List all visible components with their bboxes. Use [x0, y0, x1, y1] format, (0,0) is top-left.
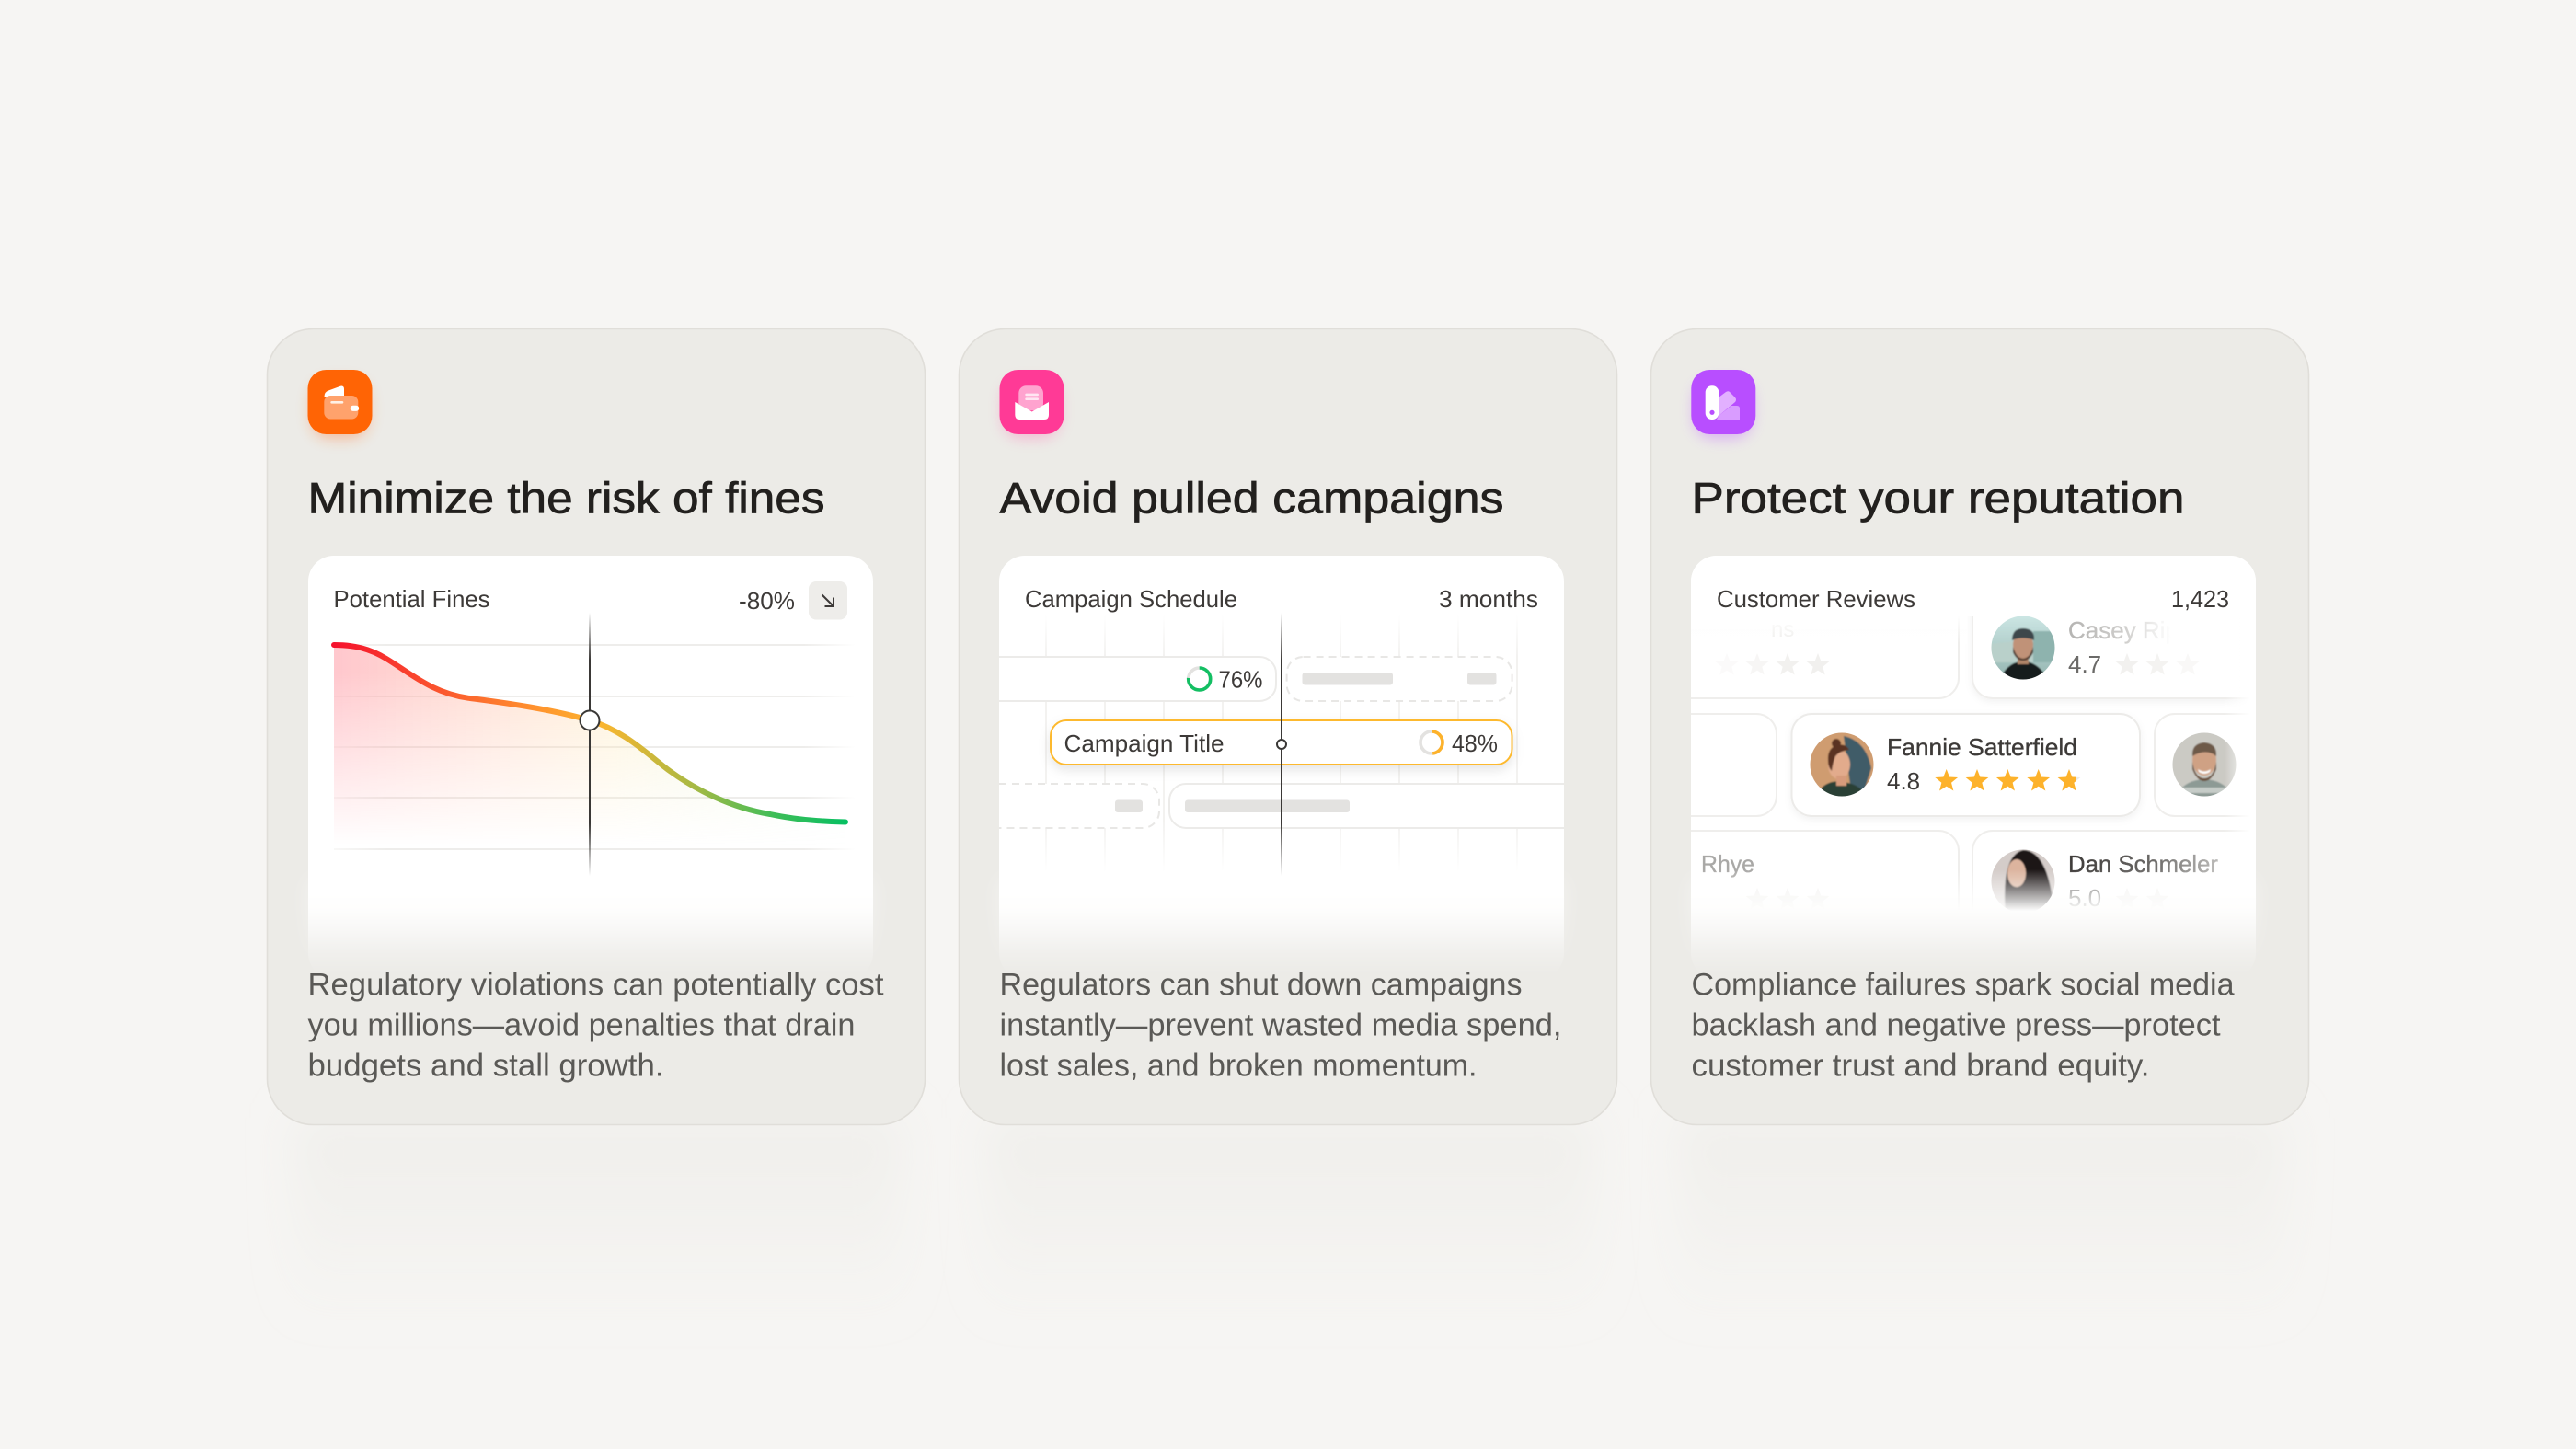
review card: casey: Casey Rippin [2068, 616, 2211, 644]
chart: gradient curve [334, 645, 845, 822]
avatar: dan [1987, 846, 2061, 920]
review card: top left faded [1691, 627, 1960, 699]
review card: dan schmeler: Dan Schmeler [2068, 850, 2218, 878]
text block: description: instantly—prevent wasted media spend, [999, 1008, 1562, 1043]
widget: customer reviews [1691, 556, 2256, 946]
row: solid placeholder [1169, 784, 1611, 828]
review card: top left faded: ns [1771, 617, 1794, 642]
label: potential fines: Potential Fines [333, 585, 489, 613]
text block: description [1691, 968, 2235, 1084]
icon: open envelope [999, 370, 1064, 438]
panel: minimize the risk of fines [267, 329, 926, 1124]
label: campaign schedule: Campaign Schedule [1025, 585, 1237, 613]
widget: potential fines chart [308, 556, 873, 979]
text block: description: Compliance failures spark social media [1691, 968, 2235, 1003]
review card: dan schmeler: 5.0 [2068, 884, 2101, 912]
chart: area under curve [334, 648, 703, 819]
review card: fannie satterfield: Fannie Satterfield [1887, 733, 2077, 761]
row: dashed placeholder [999, 783, 1160, 829]
row: 76% task: 76% [1218, 666, 1262, 694]
widget: campaign schedule [999, 556, 1564, 946]
panel: avoid pulled campaigns [957, 329, 1617, 1124]
text block: description: lost sales, and broken momentum. [999, 1049, 1478, 1084]
avatar: casey [1991, 616, 2055, 679]
review card: rhye: Rhye [1701, 850, 1754, 878]
chart: marker line [589, 613, 591, 876]
text block: description [999, 968, 1562, 1084]
chart: marker dot [580, 710, 600, 730]
avatar: smiling man [2171, 731, 2240, 800]
review card: fannie satterfield [1792, 714, 2140, 816]
text block: description [307, 968, 884, 1084]
row: highlighted campaign title [1051, 720, 1512, 765]
value: 3 months: 3 months [1439, 585, 1538, 613]
text block: description: backlash and negative press—protect [1691, 1008, 2221, 1043]
icon: wallet [307, 370, 372, 438]
row: highlighted campaign title: Campaign Title [1064, 730, 1224, 757]
heading: Avoid pulled campaigns [999, 473, 1503, 523]
row: highlighted campaign title: 48% [1452, 730, 1498, 757]
review card: middle right [2155, 714, 2283, 816]
row: 76% task [975, 657, 1276, 701]
icon: colour swatches [1691, 370, 1755, 438]
review card: middle left [1691, 713, 1777, 817]
label: customer reviews: Customer Reviews [1717, 585, 1915, 613]
panel: protect your reputation [1638, 329, 2309, 1124]
value: 1,423: 1,423 [2171, 585, 2229, 613]
icon: down-right arrow button [809, 581, 847, 620]
text block: description: Regulators can shut down campaigns [999, 968, 1522, 1003]
avatar: fannie [1808, 731, 1877, 800]
review card: rhye [1638, 831, 1959, 960]
value: -80%: -80% [739, 587, 795, 615]
text block: description: budgets and stall growth. [307, 1049, 664, 1084]
heading: Minimize the risk of fines [307, 473, 824, 523]
review card: casey [1972, 616, 2239, 701]
row: placeholder dashed task [1287, 657, 1512, 701]
review card: fannie satterfield: 4.8 [1887, 767, 1920, 795]
text block: description: you millions—avoid penalties that drain [307, 1008, 856, 1043]
heading: Protect your reputation [1691, 473, 2184, 523]
marker dot [1277, 740, 1286, 749]
review card: dan schmeler [1972, 831, 2285, 960]
text block: description: Regulatory violations can potentially cost [307, 968, 884, 1003]
text block: description: customer trust and brand equity. [1691, 1049, 2149, 1084]
review card: casey: 4.7 [2068, 650, 2101, 678]
marker line [1281, 607, 1282, 876]
